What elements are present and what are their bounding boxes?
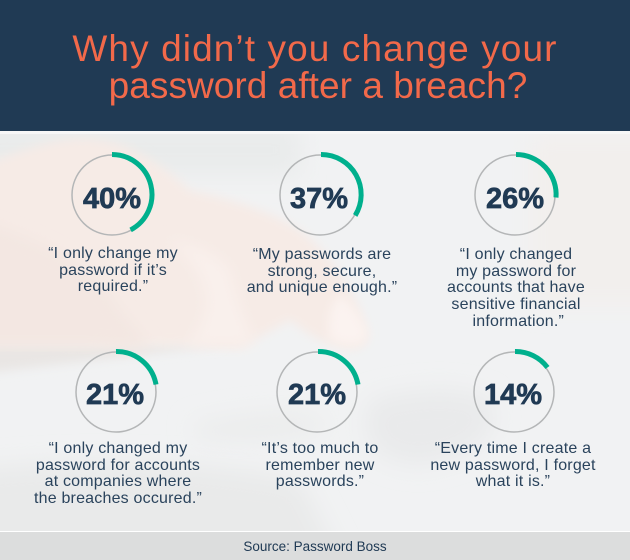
title banner: Why didn’t you change your [72, 28, 558, 69]
quote: 21% too much [262, 440, 378, 490]
stat: 14% ring: 14% [484, 379, 542, 411]
title banner: password after a breach? [109, 65, 527, 106]
source footer: Source: Password Boss [243, 539, 387, 554]
quote: 37%: “My passwords are [253, 246, 391, 263]
stat: 40% ring: 40% [83, 183, 141, 215]
quote: 37% [247, 246, 397, 296]
quote: 21% companies [34, 440, 202, 507]
quote: 40%: required.” [78, 278, 148, 295]
quote: 14% [430, 440, 596, 490]
quote: 14%: what it is.” [476, 473, 550, 490]
quote: 26% [447, 246, 585, 330]
quote: 26%: “I only changed [460, 246, 572, 263]
source footer [0, 531, 630, 560]
quote: 21% too much: “It’s too much to [262, 440, 378, 457]
quote: 21% companies: password for accounts [36, 457, 200, 474]
quote: 40%: password if it’s [59, 262, 167, 279]
quote: 26%: information.” [473, 313, 564, 330]
quote: 37%: and unique enough.” [247, 279, 397, 296]
quote: 26%: sensitive financial [451, 296, 581, 313]
stat: 21% ring (too much): 21% [288, 379, 346, 411]
quote: 21% companies: at companies where [45, 473, 191, 490]
title banner [0, 0, 630, 131]
quote: 40% [48, 245, 178, 295]
stat: 37% ring: 37% [290, 183, 348, 215]
quote: 21% companies: the breaches occured.” [34, 490, 202, 507]
stat: 26% ring: 26% [486, 183, 544, 215]
quote: 14%: new password, I forget [430, 457, 596, 474]
quote: 21% too much: remember new [265, 457, 375, 474]
quote: 40%: “I only change my [48, 245, 178, 262]
quote: 21% too much: passwords.” [276, 473, 364, 490]
quote: 26%: accounts that have [447, 279, 585, 296]
quote: 26%: my password for [456, 263, 576, 280]
quote: 21% companies: “I only changed my [49, 440, 187, 457]
quote: 14%: “Every time I create a [435, 440, 591, 457]
stat: 21% ring (companies): 21% [86, 379, 144, 411]
quote: 37%: strong, secure, [268, 263, 376, 280]
